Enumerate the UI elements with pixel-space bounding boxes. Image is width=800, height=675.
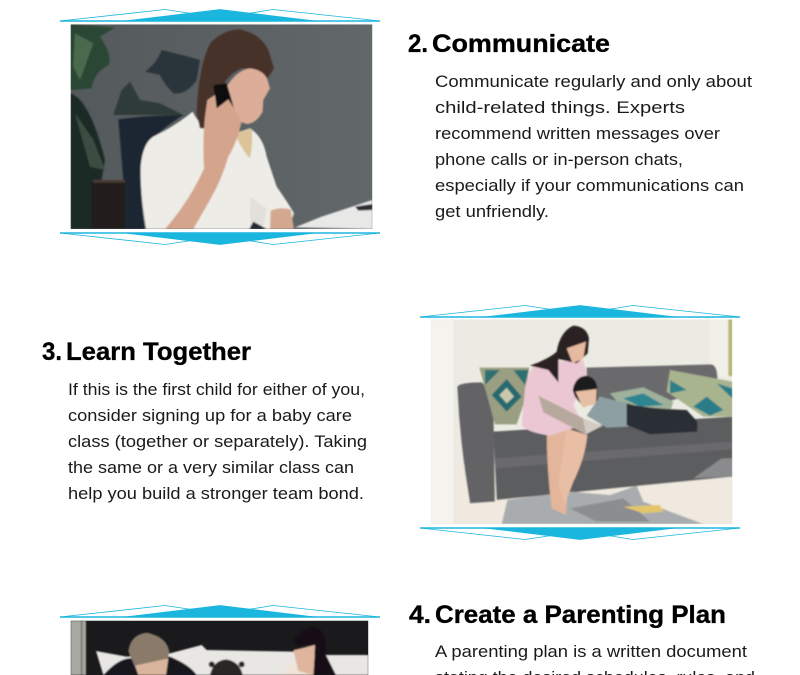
photo: mother and child on sofa: [431, 319, 732, 524]
heading: communicate: Communicate: [432, 30, 610, 58]
ornament: top of photo 2: [420, 306, 740, 317]
text: parenting plan body: A parenting plan is a written document: [435, 642, 747, 661]
phone: [213, 82, 234, 108]
text: communicate body: get unfriendly.: [435, 202, 549, 221]
child: [573, 376, 597, 407]
text: communicate body: Communicate regularly and only about: [435, 72, 752, 91]
papers: [295, 200, 372, 229]
ornament: top of photo 1: [60, 10, 380, 21]
blanket: [502, 486, 703, 524]
ornament: bottom of photo 2: [420, 528, 740, 540]
text: learn together body: class (together or separately). Taking: [68, 432, 367, 451]
shirt: [141, 112, 294, 229]
pillows: [479, 368, 529, 424]
hand and arm: [165, 95, 242, 229]
text: parenting plan body: [435, 642, 755, 675]
woman dress: [522, 360, 587, 436]
heading: communicate: 2.: [408, 30, 428, 58]
text: learn together body: the same or a very similar class can: [68, 458, 354, 477]
ornament: top of photo 3: [60, 606, 380, 617]
text: communicate body: [435, 72, 752, 221]
photo: family on bed: [71, 621, 368, 675]
heading: learn together: Learn Together: [66, 338, 251, 366]
text: communicate body: especially if your communications can: [435, 176, 744, 195]
laptop: [538, 396, 586, 434]
heading: create a parenting plan: 4.: [409, 601, 431, 629]
text: learn together body: [68, 380, 367, 503]
section 3: learn together: [42, 306, 740, 540]
ornament: bottom of photo 1: [60, 233, 380, 244]
text: communicate body: child-related things. Experts: [435, 98, 685, 117]
text: learn together body: If this is the first child for either of you,: [68, 380, 365, 399]
heading: learn together: 3.: [42, 338, 62, 366]
section 2: communicate: [60, 10, 752, 244]
face: [227, 68, 270, 124]
woman legs: [547, 428, 570, 515]
section 4: parenting plan: [60, 601, 755, 675]
woman hair: [530, 326, 589, 382]
text: communicate body: recommend written messages over: [435, 124, 720, 143]
leaves top left: [71, 24, 115, 90]
hair: [197, 29, 274, 128]
photo: woman on phone: [71, 24, 372, 229]
text: learn together body: consider signing up for a baby care: [68, 406, 352, 425]
text: learn together body: help you build a stronger team bond.: [68, 484, 364, 503]
text: communicate body: phone calls or in-person chats,: [435, 150, 683, 169]
heading: create a parenting plan: Create a Parenting Plan: [435, 601, 726, 629]
sofa: [587, 364, 717, 402]
